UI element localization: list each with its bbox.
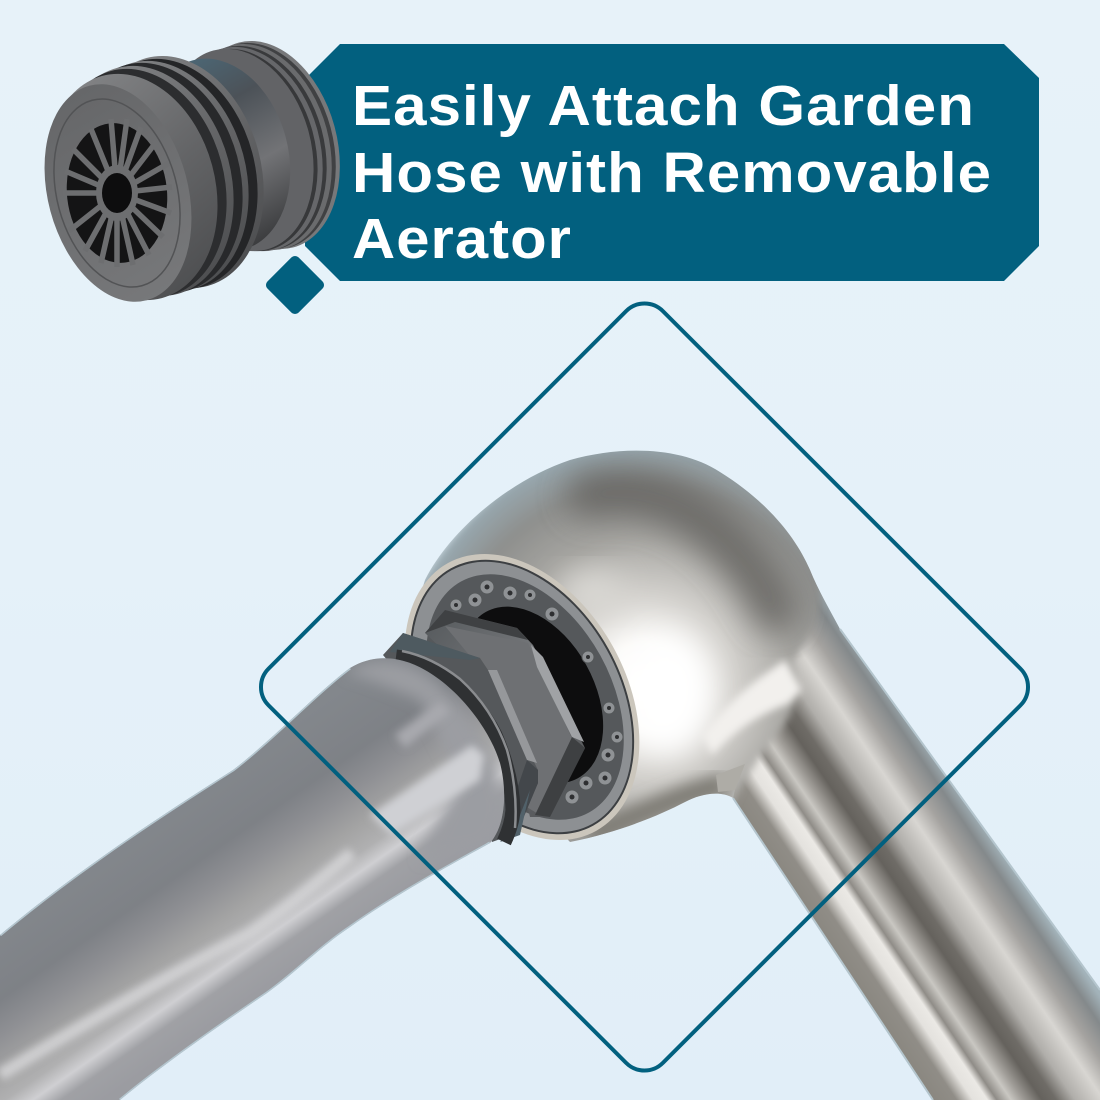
aerator spoke grille [60,118,174,268]
steel faucet arm [733,560,1100,1100]
steel ball [423,450,823,842]
highlight streak at elbow [702,660,802,755]
title text: Hose with Removable [352,141,992,205]
pipe highlight lower [370,745,484,835]
pipe pale edge [0,668,490,1100]
pale edge of arm [733,629,1100,1100]
front threaded section [22,36,289,320]
aerator face [22,68,214,318]
elbow weld facet [716,764,745,792]
rear threaded section [145,24,362,268]
aerator nozzle holes [454,584,619,800]
title text: Aerator [352,207,572,271]
large diamond outline [250,293,1039,1081]
neck section [125,42,311,268]
dark collar behind hose adapter [396,657,513,842]
dark crescent shading on ball [590,492,775,610]
title text [352,74,992,271]
rear hex nut [425,610,585,817]
soft reflection near rim [560,572,624,612]
small diamond accent [264,254,326,316]
pipe highlight upper [394,706,445,748]
aerator nozzles [450,580,623,804]
front hex nut [383,633,538,842]
title text: Easily Attach Garden [352,74,975,138]
pipe dome tone [353,659,503,843]
faucet spout with attached hose adapter [0,441,1100,1100]
brushed steel faucet head and arm [390,441,1100,1100]
aerator mount ring [357,513,687,881]
lower ball shading [590,785,725,835]
pipe main streak [0,853,352,1075]
aerator product photo [22,24,362,320]
title banner [305,44,1039,281]
bright reflection on ball [626,637,710,753]
gray hose adapter pipe [0,640,520,1100]
